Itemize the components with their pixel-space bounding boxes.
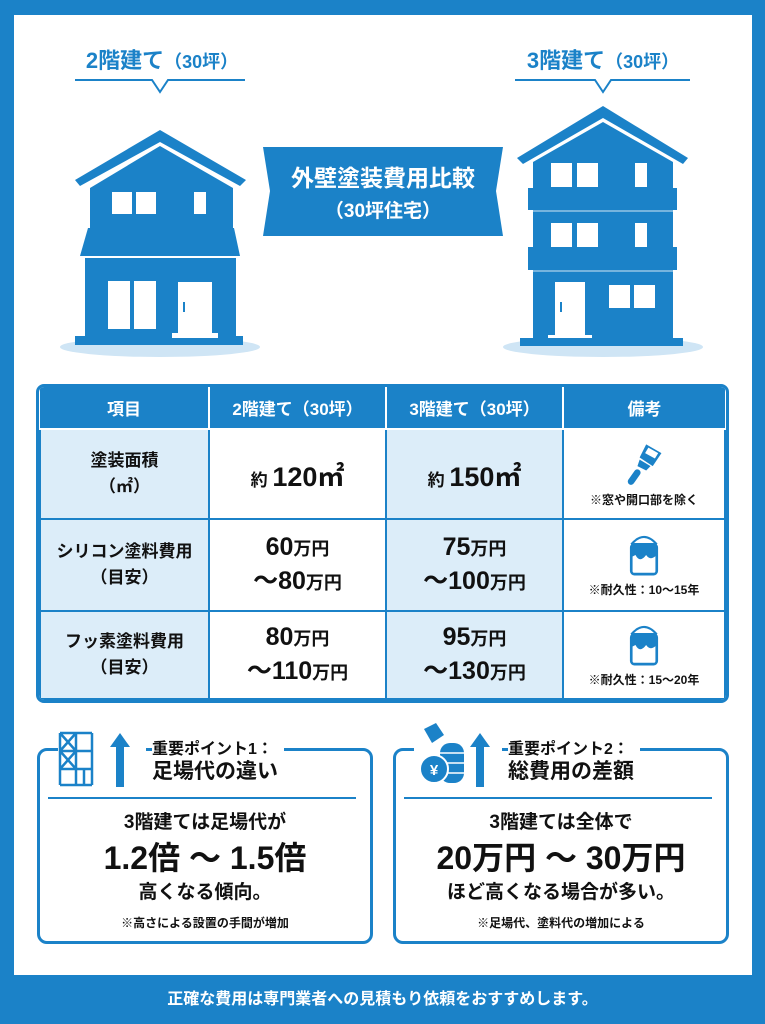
footer banner: 正確な費用は専門業者への見積もり依頼をおすすめします。 (167, 991, 598, 1008)
heading: 重要ポイント1： (152, 741, 273, 758)
coins icon: ¥ (430, 762, 439, 779)
comparison table: 項目 (107, 400, 141, 419)
icon: 3-story house (503, 106, 703, 357)
comparison table: 約 120㎡ (251, 462, 344, 492)
heading: 重要ポイント2： (508, 741, 629, 758)
label: 3-story: 3階建て（30坪） (527, 48, 679, 73)
comparison table: ※耐久性：10～15年 (589, 583, 699, 597)
title banner: 外壁塗装費用比較 (291, 165, 475, 191)
comparison table (36, 384, 729, 703)
comparison table: ～80万円 (253, 567, 342, 595)
heading (152, 739, 284, 783)
comparison table: （㎡） (99, 477, 150, 496)
comparison table: ～110万円 (247, 657, 348, 685)
comparison table: 95万円 (443, 623, 506, 651)
illustration: houses (60, 48, 703, 357)
comparison table: ～130万円 (423, 657, 526, 685)
text: ※高さによる設置の手間が増加 (121, 916, 289, 930)
coins icon (414, 721, 502, 787)
label: 3-story (515, 48, 690, 92)
comparison table: フッ素塗料費用 (65, 632, 184, 651)
title banner: （30坪住宅） (325, 200, 441, 222)
comparison table: 80万円 (266, 623, 329, 651)
icon: paint can (630, 536, 658, 576)
comparison table: （目安） (90, 658, 158, 677)
heading: 総費用の差額 (508, 760, 634, 783)
label: 2-story (75, 48, 245, 92)
text: ほど高くなる場合が多い。 (447, 882, 675, 903)
comparison table: 約 150㎡ (428, 462, 521, 492)
text (104, 812, 306, 930)
icon: paint brush (628, 444, 662, 485)
text: 1.2倍 ～ 1.5倍 (104, 840, 306, 876)
comparison table: 塗装面積 (90, 451, 158, 470)
heading: 足場代の違い (152, 760, 278, 783)
comparison table: 60万円 (266, 533, 329, 561)
title banner (263, 147, 503, 236)
text: 3階建ては全体で (489, 812, 633, 833)
comparison table: ～100万円 (423, 567, 526, 595)
text (436, 812, 685, 930)
comparison table: ※耐久性：15～20年 (589, 673, 699, 687)
icon: 2-story house (60, 130, 260, 357)
icon: paint can (630, 626, 658, 666)
comparison table: 3階建て（30坪） (409, 400, 540, 419)
comparison table: 2階建て（30坪） (232, 400, 363, 419)
text: 3階建ては足場代が (124, 812, 286, 833)
comparison table: ※窓や開口部を除く (590, 493, 698, 507)
text: 20万円 ～ 30万円 (436, 840, 685, 876)
text: 高くなる傾向。 (138, 882, 272, 903)
comparison table: 備考 (628, 400, 662, 419)
scaffold icon (58, 729, 146, 787)
heading (508, 739, 640, 783)
comparison table: （目安） (90, 568, 158, 587)
text: ※足場代、塗料代の増加による (477, 916, 645, 930)
comparison table: 75万円 (443, 533, 506, 561)
label: 2-story: 2階建て（30坪） (86, 48, 238, 73)
comparison table: シリコン塗料費用 (56, 542, 192, 561)
point 1 box (37, 748, 373, 944)
point 2 box (393, 748, 729, 944)
